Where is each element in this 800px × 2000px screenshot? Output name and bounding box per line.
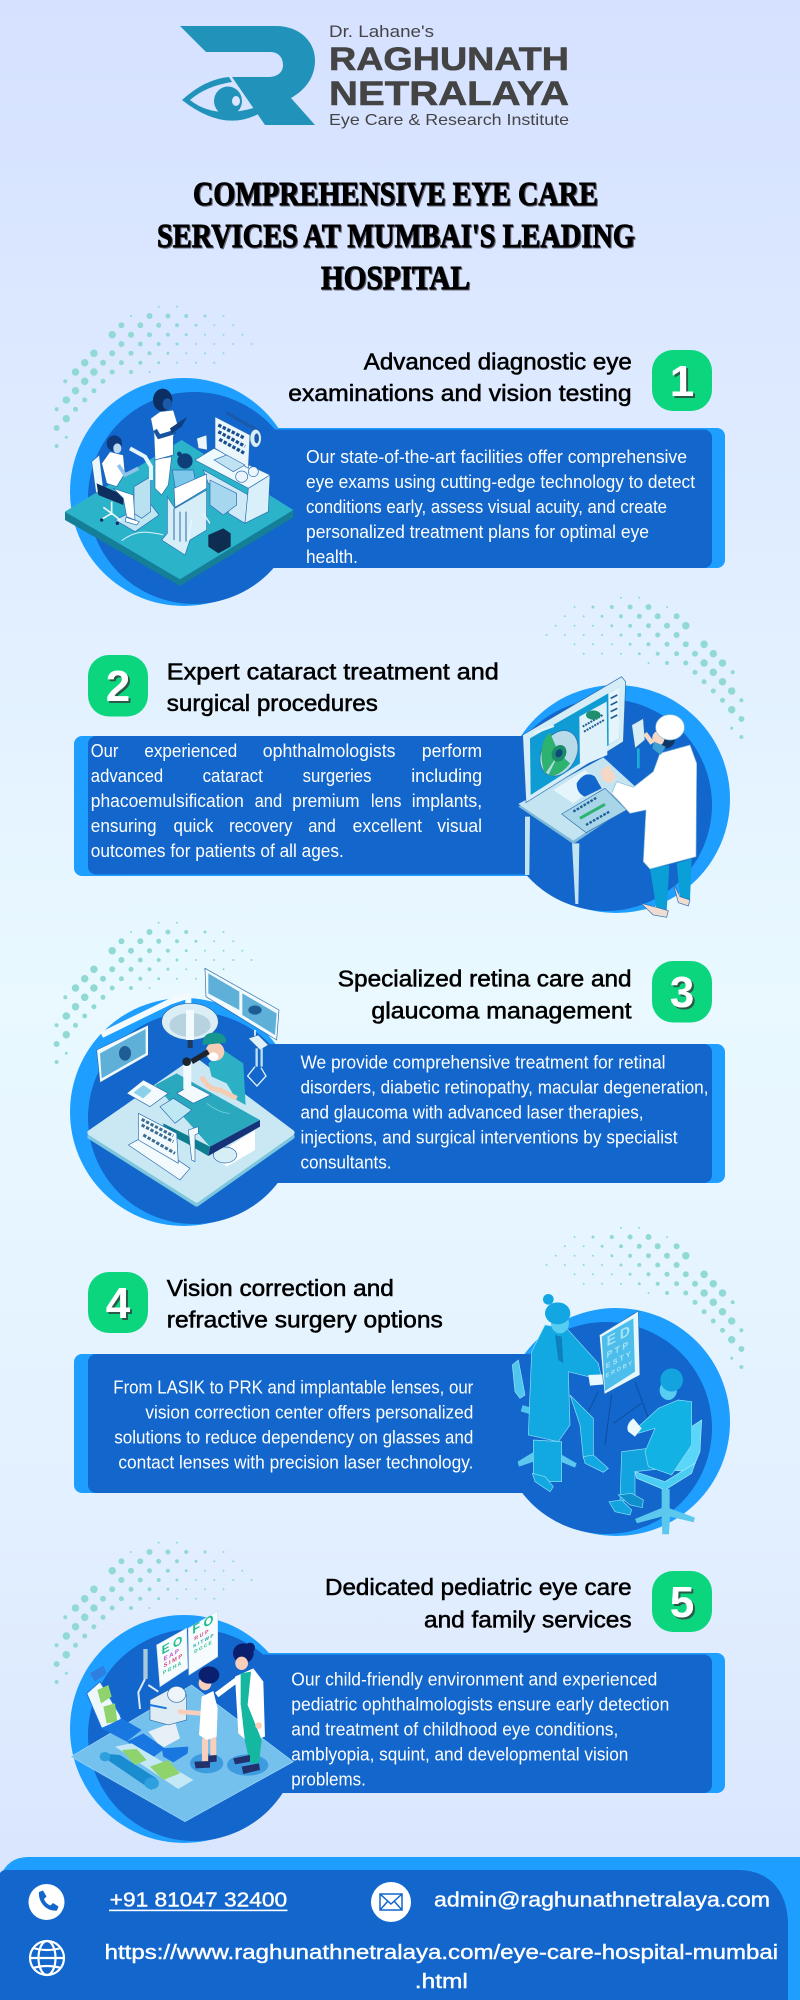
eye charts: P G H A (163, 1661, 181, 1677)
illustration: retina surgery theatre (90, 968, 292, 1204)
body text 5: pediatric ophthalmologists ensure early detection (291, 1694, 669, 1714)
eye charts: R U P (194, 1629, 209, 1643)
body text 1: Our state-of-the-art facilities offer comprehensive (306, 447, 687, 467)
body text 3: and glaucoma with advanced laser therapies, (300, 1102, 644, 1122)
heading 4 (167, 1275, 443, 1333)
heading 5: and family services (424, 1606, 632, 1632)
text card 3 (200, 1044, 725, 1183)
eye charts (157, 1611, 218, 1687)
eye charts: S I M P (164, 1653, 182, 1669)
heading 3 (338, 966, 632, 1024)
heading 3: glaucoma management (371, 998, 632, 1024)
illustration: eye examination room (65, 389, 293, 586)
body text 5: problems. (291, 1770, 366, 1790)
badge 1: 1 (670, 357, 694, 406)
title: HOSPITAL (321, 260, 470, 297)
logo wordmark (329, 22, 569, 129)
title: COMPREHENSIVE EYE CARE (193, 176, 598, 213)
footer background (0, 1857, 800, 2000)
surgeon (202, 1033, 246, 1105)
body text 2 justified: ophthalmologists (263, 741, 396, 761)
dot pattern 4 (546, 1228, 741, 1367)
panel: service 1 diagnostic examinations (57, 307, 725, 606)
panel: service 2 cataract treatment (74, 598, 741, 917)
circle backdrop 2 (500, 685, 730, 913)
eye charts: D G C E (194, 1640, 212, 1655)
standing doctor (151, 389, 187, 495)
heading 2: Expert cataract treatment and (167, 658, 499, 684)
body text 2 justified: premium (292, 791, 360, 811)
body text 2 justified: excellent (353, 816, 422, 836)
title (157, 176, 635, 297)
dot pattern 5 (57, 1543, 251, 1682)
heading 1: examinations and vision testing (288, 380, 632, 406)
dot pattern 3 (57, 923, 251, 1062)
body text 2 justified: ensuring (91, 816, 157, 836)
badge 1 (652, 350, 712, 411)
body text 4: From LASIK to PRK and implantable lenses, our (113, 1378, 473, 1398)
body text 2 justified: and (308, 816, 336, 836)
dot pattern 1 (57, 307, 251, 446)
body text 1: conditions early, assess visual acuity, and create (306, 497, 667, 517)
text card 2 (74, 736, 600, 876)
doctor with child (217, 1643, 265, 1774)
heading 1 (288, 348, 632, 406)
body text 2 justified: and (255, 791, 282, 811)
optometrist (528, 1325, 602, 1442)
body text 2 justified: visual (437, 816, 482, 836)
body text 2 justified: Our (91, 741, 118, 761)
eye chart: E R O B Y (606, 1361, 632, 1380)
body text 3: injections, and surgical interventions by specialist (300, 1128, 678, 1148)
body text 3: We provide comprehensive treatment for retinal (300, 1052, 666, 1072)
eye chart: P T P (607, 1340, 628, 1360)
panel: service 3 retina and glaucoma (57, 923, 725, 1226)
body text 2 justified: lens (371, 791, 402, 811)
body text 2 justified: outcomes for patients of all ages. (91, 841, 344, 861)
eye charts: E A P (164, 1648, 180, 1663)
website url: https://www.raghunathnetralaya.com/eye-care-hospital-mumbai (105, 1942, 778, 1964)
logo wordmark: RAGHUNATH (329, 41, 569, 77)
eye chart: E S T Y (606, 1349, 632, 1371)
body text 2 justified: cataract (203, 766, 263, 786)
body text 1: personalized treatment plans for optimal eye (306, 522, 649, 542)
text card 1 (200, 428, 725, 568)
body text 2 justified: recovery (229, 816, 292, 836)
dot pattern 2 (546, 598, 741, 737)
circle backdrop 3 (70, 998, 300, 1226)
body text 2 justified (91, 741, 482, 861)
child patient (180, 1666, 219, 1768)
icon: phone (28, 1884, 64, 1920)
logo: Raghunath Netralaya (180, 22, 569, 129)
illustration: doctor at diagnostic screen (518, 677, 697, 917)
title: SERVICES AT MUMBAI'S LEADING (157, 218, 635, 255)
logo wordmark: Dr. Lahane's (329, 22, 434, 41)
website url: .html (415, 1971, 468, 1993)
body text 4: solutions to reduce dependency on glasses and (114, 1428, 473, 1448)
badge 5 (652, 1571, 712, 1632)
heading 4: Vision correction and (167, 1275, 394, 1301)
phone number: +91 81047 32400 (110, 1890, 287, 1912)
body text 5: Our child-friendly environment and experienced (291, 1670, 657, 1690)
eye charts: K I T W P (193, 1633, 214, 1650)
patient (668, 1420, 702, 1472)
body text 5: amblyopia, squint, and developmental vision (291, 1744, 628, 1764)
panel: service 4 vision correction (74, 1228, 741, 1536)
body text 4: contact lenses with precision laser technology. (118, 1452, 473, 1472)
badge 3: 3 (670, 968, 694, 1017)
illustration: optometrist and patient (512, 1294, 702, 1534)
body text 3: disorders, diabetic retinopathy, macular degeneration, (300, 1078, 708, 1098)
website url (105, 1942, 778, 1993)
body text 1: health. (306, 547, 358, 567)
heading 2 (167, 658, 499, 716)
circle backdrop 5 (70, 1615, 300, 1843)
panel: service 5 pediatric care (57, 1543, 725, 1843)
body text 5: and treatment of childhood eye conditions, (291, 1720, 618, 1740)
treatment chair (87, 1666, 193, 1790)
illustration: child eye exam (71, 1611, 293, 1822)
heading 4: refractive surgery options (167, 1307, 443, 1333)
eye chart: E D (607, 1323, 630, 1350)
badge 2: 2 (106, 662, 130, 711)
body text 1: eye exams using cutting-edge technology to detect (306, 472, 695, 492)
body text 2 justified: advanced (91, 766, 163, 786)
heading 3: Specialized retina care and (338, 966, 632, 992)
eye chart (599, 1311, 640, 1394)
text card 5 (200, 1653, 725, 1793)
footer contact bar (0, 1857, 800, 2000)
badge 3 (652, 961, 712, 1022)
body text 2 justified: surgeries (303, 766, 372, 786)
body text 2 justified: experienced (144, 741, 237, 761)
body text 4 (113, 1378, 473, 1472)
logo mark: R and eye (180, 26, 315, 125)
doctor in white coat (612, 745, 697, 869)
circle backdrop 4 (500, 1308, 730, 1536)
eye charts: F O (192, 1612, 213, 1637)
body text 2 justified: implants, (412, 791, 482, 811)
text card 4 (74, 1354, 600, 1493)
body text 2 justified: quick (174, 816, 214, 836)
eye charts: E O (162, 1632, 182, 1658)
heading 2: surgical procedures (167, 690, 378, 716)
heading 1: Advanced diagnostic eye (364, 348, 632, 374)
body text 5 (291, 1670, 669, 1790)
body text 2 justified: phacoemulsification (91, 791, 244, 811)
badge 2 (88, 655, 148, 716)
badge 4 (88, 1272, 148, 1333)
logo wordmark: NETRALAYA (329, 75, 569, 113)
icon: globe (30, 1941, 64, 1975)
icon: envelope (371, 1882, 411, 1922)
body text 2 justified: perform (422, 741, 482, 761)
body text 3: consultants. (300, 1152, 392, 1172)
heading 5: Dedicated pediatric eye care (325, 1574, 632, 1600)
badge 4: 4 (106, 1279, 131, 1328)
email: admin@raghunathnetralaya.com (434, 1890, 770, 1912)
circle backdrop 1 (70, 378, 300, 606)
body text 3 (300, 1052, 708, 1172)
body text 1 (306, 447, 695, 567)
logo wordmark: Eye Care & Research Institute (329, 112, 569, 129)
heading 5 (325, 1574, 632, 1632)
body text 4: vision correction center offers personalized (145, 1402, 473, 1422)
body text 2 justified: including (411, 766, 482, 786)
badge 5: 5 (670, 1578, 694, 1627)
